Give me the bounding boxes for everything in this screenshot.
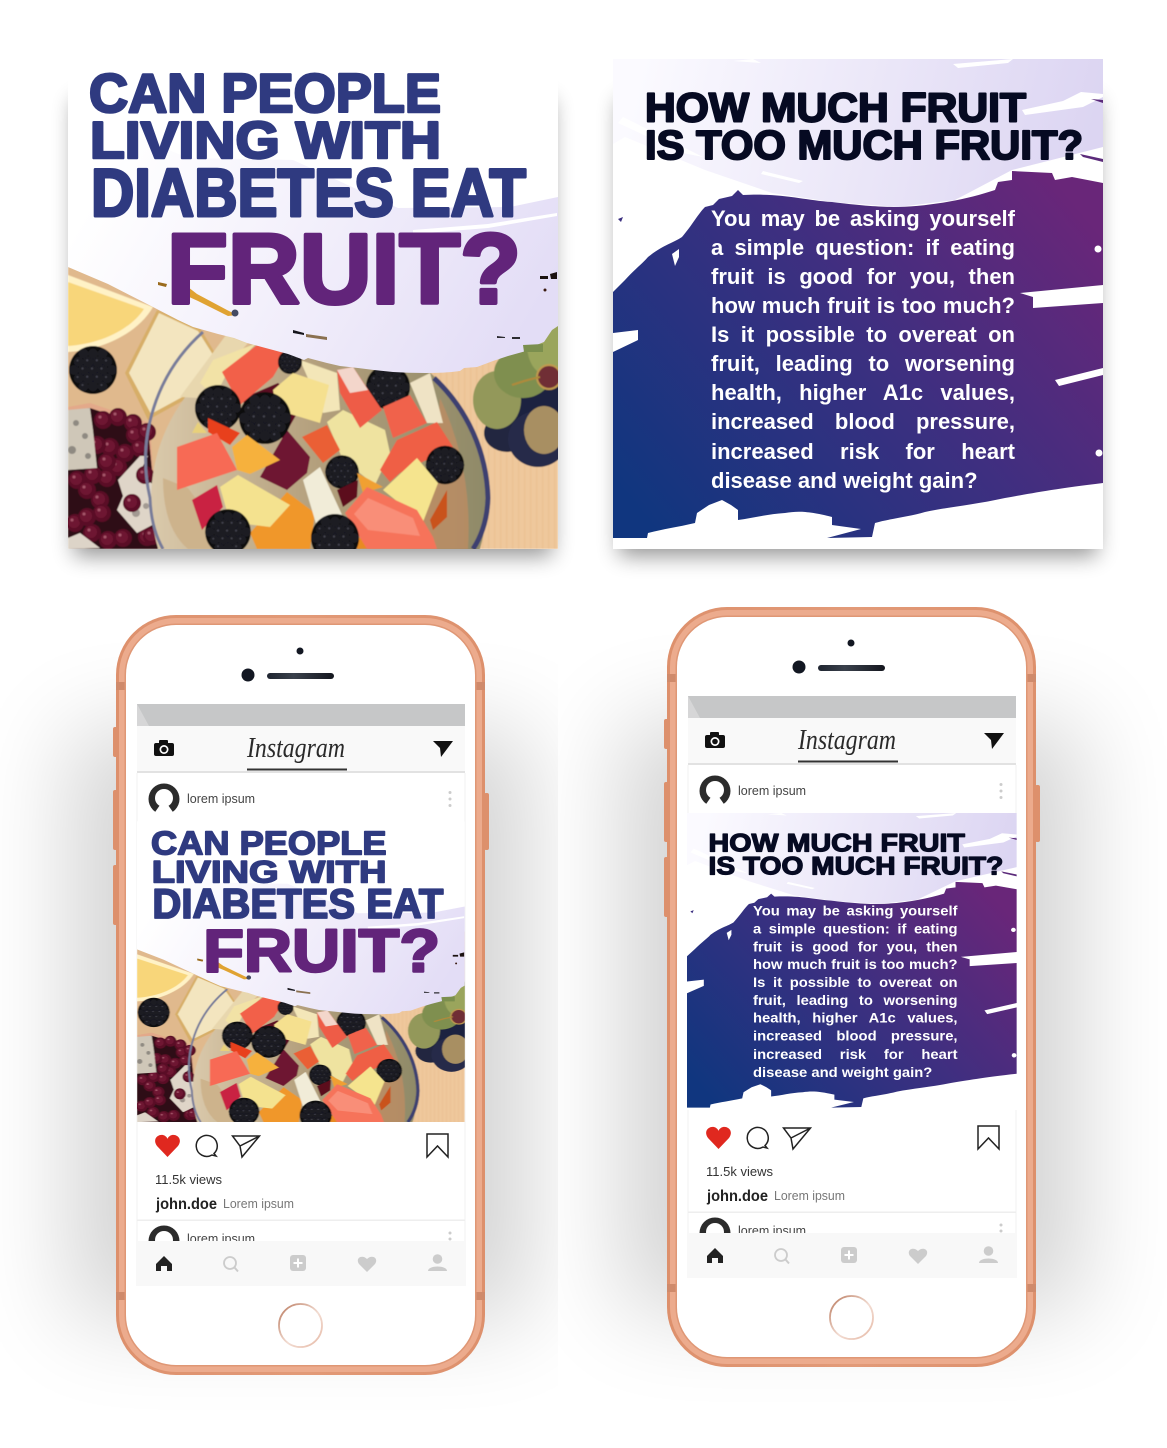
body text: a simple question: if eating xyxy=(711,235,1015,260)
body text: fruit, leading to worsening xyxy=(711,351,1015,376)
home button xyxy=(279,1304,322,1347)
post image: text poster: health, higher A1c values, xyxy=(753,1011,958,1026)
body text: increased risk for heart xyxy=(711,439,1015,464)
post header: lorem ipsum xyxy=(738,784,806,798)
text: views: 11.5k views xyxy=(155,1172,222,1187)
next post header xyxy=(148,1226,452,1257)
post image: text poster: IS TOO MUCH FRUIT? xyxy=(709,852,1003,880)
post image: fruit poster: DIABETES EAT xyxy=(152,882,444,928)
next post header: lorem ipsum xyxy=(187,1232,255,1246)
post image: text poster: disease and weight gain? xyxy=(753,1064,932,1080)
post image: fruit poster: CAN PEOPLE xyxy=(151,825,387,862)
heading: poster 2 title: HOW MUCH FRUIT xyxy=(645,84,1026,130)
body text: fruit is good for you, then xyxy=(711,264,1015,289)
heading: FRUIT: FRUIT? xyxy=(167,213,521,324)
icon: camera xyxy=(154,740,174,756)
background shadow: right phone xyxy=(621,722,1081,1312)
post image: fruit poster: FRUIT? xyxy=(203,918,440,985)
body text: You may be asking yourself xyxy=(711,206,1015,231)
post image: text poster: You may be asking yourself xyxy=(753,903,958,919)
text: views: 11.5k views xyxy=(706,1164,773,1179)
icon: direct message xyxy=(433,741,453,757)
post header xyxy=(148,784,452,815)
heading: poster 2 title: IS TOO MUCH FRUIT? xyxy=(645,122,1083,168)
poster: how much fruit is too much fruit xyxy=(613,59,1103,556)
post image: text poster: Is it possible to overeat on xyxy=(753,975,958,990)
post image: text poster: increased blood pressure, xyxy=(753,1029,958,1044)
tab bar xyxy=(137,1241,465,1286)
post image: fruit poster xyxy=(137,822,465,1122)
text: caption xyxy=(155,1196,294,1213)
post image: text poster: HOW MUCH FRUIT xyxy=(709,829,965,857)
heading: poster 1 title: DIABETES EAT xyxy=(91,155,526,231)
logo: Instagram: Instagram xyxy=(246,733,345,764)
next post header: lorem ipsum xyxy=(738,1224,806,1238)
body text: how much fruit is too much? xyxy=(711,293,1015,318)
body text xyxy=(711,204,1015,500)
post image: fruit poster: LIVING WITH xyxy=(152,855,387,890)
home button xyxy=(830,1296,873,1339)
post image: text poster: increased risk for heart xyxy=(753,1046,958,1062)
action icons xyxy=(706,1126,999,1149)
text: caption xyxy=(706,1188,845,1205)
next post header xyxy=(700,1218,1002,1249)
phone: right mockup xyxy=(664,607,1040,1367)
heading: poster 1 title: LIVING WITH xyxy=(90,112,441,170)
post image: text poster xyxy=(687,813,1017,1114)
body text: increased blood pressure, xyxy=(711,409,1015,434)
post image: text poster: fruit is good for you, then xyxy=(753,939,958,954)
phone: left mockup xyxy=(113,615,489,1375)
body text: disease and weight gain? xyxy=(711,468,978,493)
poster: can people living with diabetes eat fruit xyxy=(60,72,566,570)
text: caption: Lorem ipsum xyxy=(774,1188,845,1203)
action icons xyxy=(155,1134,448,1157)
text: caption: john.doe xyxy=(155,1196,217,1213)
post image: text poster: fruit, leading to worsening xyxy=(753,993,958,1008)
post image: text poster: a simple question: if eating xyxy=(753,921,958,937)
post header: lorem ipsum xyxy=(187,792,255,806)
text: caption: john.doe xyxy=(706,1188,768,1205)
icon: camera xyxy=(705,732,725,748)
post header xyxy=(700,776,1002,807)
background shadow: left phone xyxy=(70,730,530,1320)
post image: text poster: how much fruit is too much? xyxy=(753,957,958,972)
logo: Instagram: Instagram xyxy=(797,725,896,756)
heading: poster 1 title xyxy=(89,63,526,231)
heading: poster 2 title xyxy=(645,84,1083,168)
icon: direct message xyxy=(984,733,1004,749)
tab bar xyxy=(688,1233,1016,1278)
heading: poster 1 title: CAN PEOPLE xyxy=(89,63,441,124)
body text: Is it possible to overeat on xyxy=(711,322,1015,347)
body text: health, higher A1c values, xyxy=(711,380,1015,405)
text: caption: Lorem ipsum xyxy=(223,1196,294,1211)
